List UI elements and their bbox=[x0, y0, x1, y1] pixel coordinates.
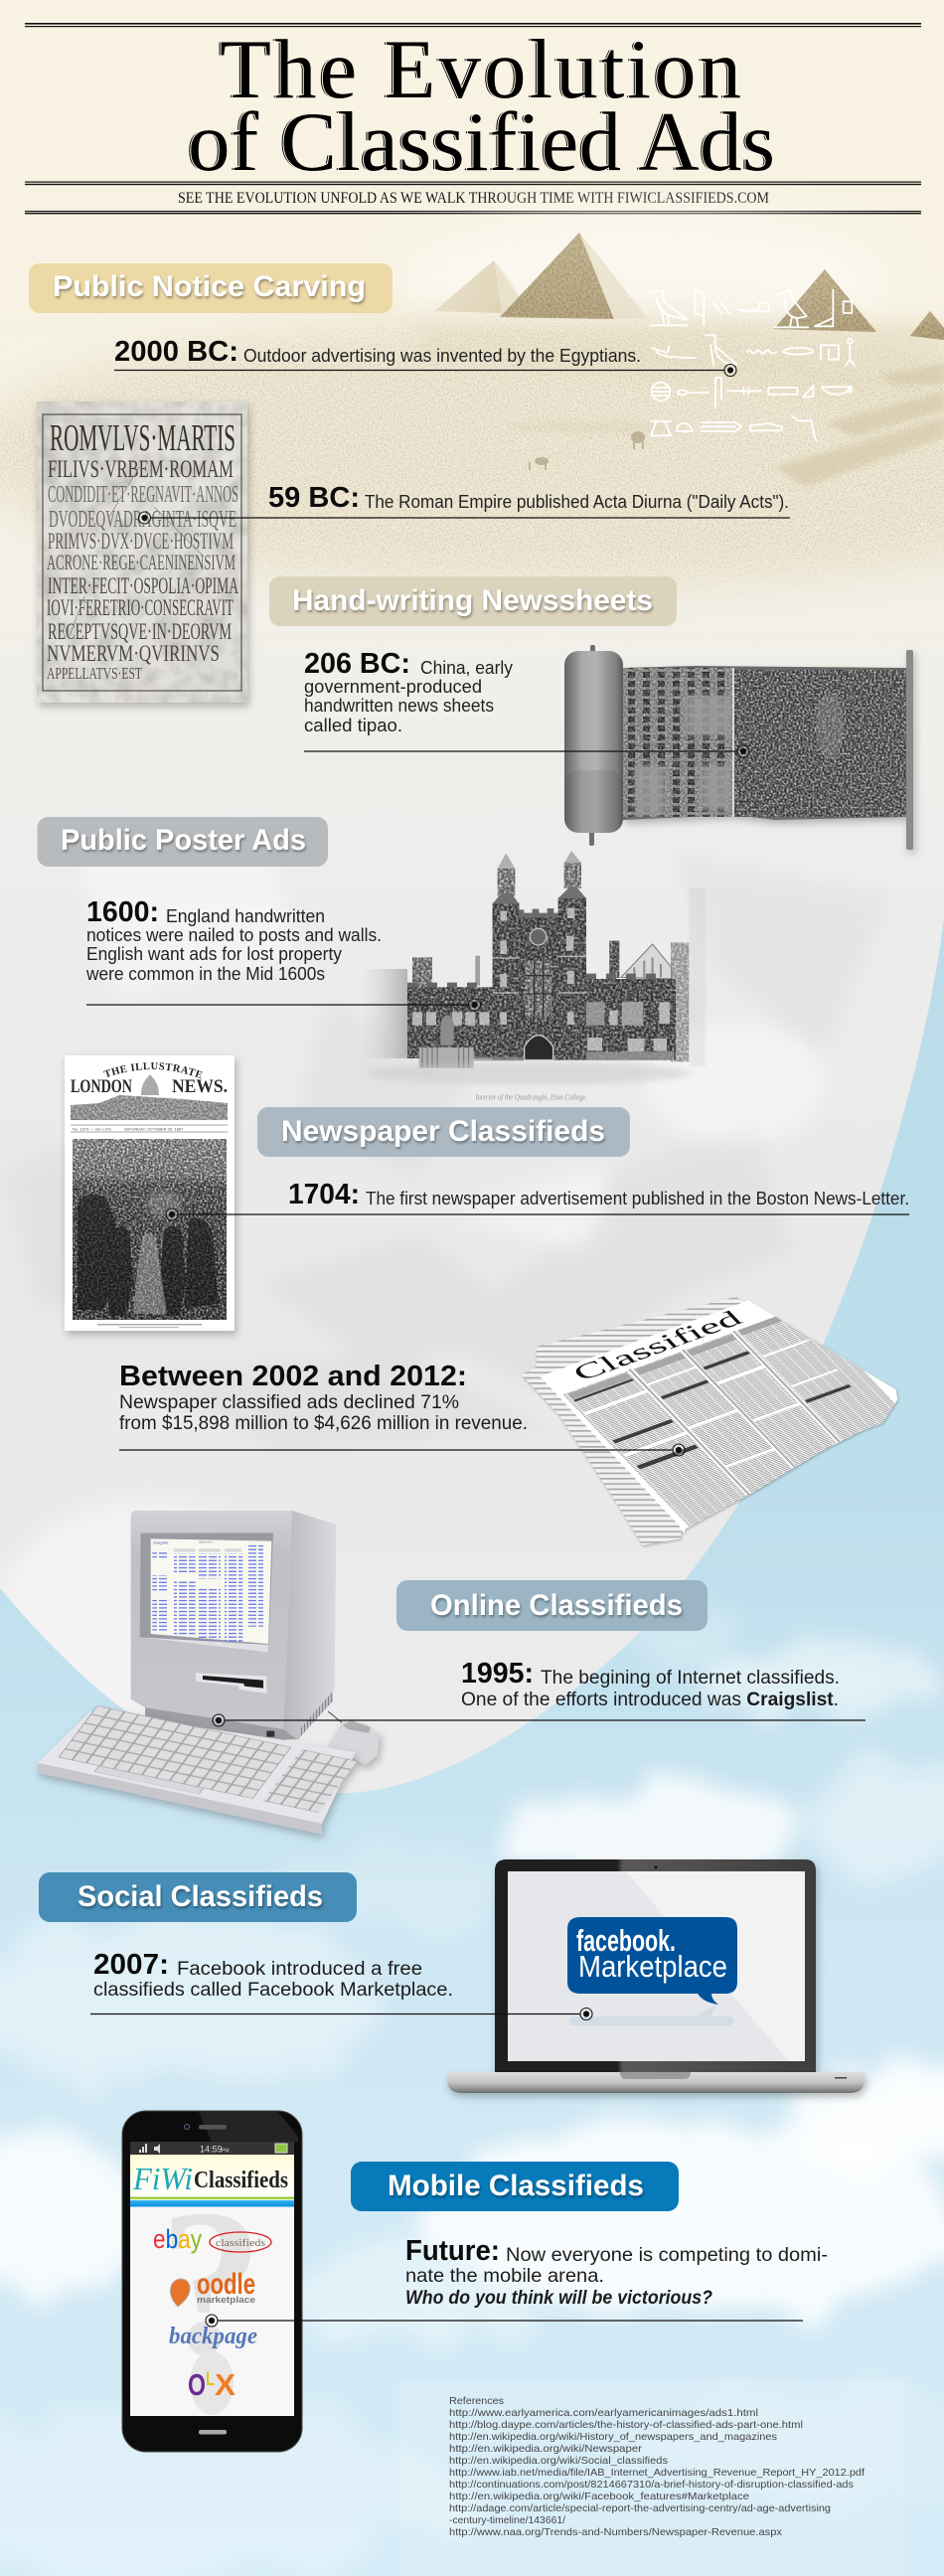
image: Roman inscription stone: CONDIDIT·ET·REGNAVIT·ANNOS bbox=[48, 482, 238, 508]
logo: FiWi Classifieds bbox=[130, 2161, 294, 2206]
stand bbox=[145, 1706, 300, 1740]
entry: 1995: One of the efforts introduced was Craigslist. bbox=[461, 1690, 839, 1710]
entry: 1704 bbox=[166, 1179, 909, 1220]
entry: Between 2002 and 2012: Between 2002 and 2012: bbox=[119, 1361, 467, 1392]
sky background bbox=[0, 894, 944, 2576]
section heading: Online Classifieds bbox=[396, 1580, 708, 1631]
entry: 2007: classifieds called Facebook Marketplace. bbox=[93, 1980, 453, 2001]
pyramid: large centre bbox=[500, 233, 648, 319]
speech bubble logo: facebook. bbox=[576, 1923, 676, 1958]
section heading: Newspaper Classifieds bbox=[257, 1107, 630, 1157]
logo: oodle marketplace bbox=[170, 2268, 255, 2307]
centre block bbox=[518, 917, 558, 1060]
entry: 2007: Facebook introduced a free bbox=[177, 1959, 422, 1980]
lid bbox=[495, 1859, 816, 2072]
lower double rule bbox=[25, 211, 921, 214]
entry: 1995: The begining of Internet classifieds. bbox=[541, 1668, 840, 1689]
paragraph gaps bbox=[583, 1339, 839, 1468]
references panel: http://en.wikipedia.org/wiki/Social_classifieds bbox=[449, 2455, 668, 2467]
references panel: http://en.wikipedia.org/wiki/Newspaper bbox=[449, 2443, 643, 2455]
references panel: http://blog.daype.com/articles/the-history-of-classified-ads-part-one.html bbox=[449, 2419, 803, 2431]
logo: backpage: backpage bbox=[169, 2324, 257, 2349]
entry: Future: Future: bbox=[405, 2235, 500, 2267]
section heading: Social Classifieds bbox=[39, 1872, 357, 1922]
camera and speaker bbox=[185, 2125, 227, 2129]
floppy slot bbox=[196, 1673, 266, 1693]
logo: ebay classifieds bbox=[153, 2224, 271, 2254]
logo: oodle marketplace: marketplace bbox=[197, 2295, 255, 2306]
home button bbox=[199, 2430, 227, 2435]
logo: FiWi Classifieds: FiWi bbox=[132, 2161, 193, 2196]
city engraving bbox=[71, 1095, 228, 1120]
references panel bbox=[398, 2379, 905, 2576]
references panel: http://continuations.com/post/8214667310/a-brief-history-of-disruption-classified-ads bbox=[449, 2479, 854, 2491]
references panel: -century-timeline/143661/ bbox=[449, 2514, 565, 2526]
large question mark: ? bbox=[159, 2168, 263, 2398]
entry: 2007 bbox=[90, 1949, 592, 2019]
screen bbox=[151, 1538, 271, 1644]
front sheet bbox=[540, 1300, 897, 1533]
caption: Interior of the Quadrangle, Eton College. bbox=[474, 1093, 587, 1102]
image: Roman inscription stone: DVODEQVADRAGINTA·ISQVE bbox=[49, 507, 236, 533]
screen bbox=[130, 2155, 294, 2416]
clouds bbox=[0, 1606, 944, 2576]
crumpled paper background with curved edge bbox=[0, 699, 944, 1793]
entry: 1600: 1600: bbox=[86, 896, 159, 928]
gate bbox=[525, 1036, 553, 1060]
section heading: Social Classifieds: Social Classifieds bbox=[78, 1880, 323, 1913]
entry: 206 BC: China, early bbox=[420, 658, 513, 678]
logo: oodle marketplace: oodle bbox=[197, 2268, 255, 2301]
entry: 1600: English want ads for lost property bbox=[86, 944, 342, 964]
entry: 59 BC: 59 BC: bbox=[268, 482, 360, 514]
ground bbox=[366, 1062, 691, 1084]
entry: 2000 BC: 2000 BC: bbox=[114, 336, 238, 368]
cover picture bbox=[73, 1139, 227, 1320]
entry: 206 BC: 206 BC: bbox=[304, 648, 410, 680]
entry: Future bbox=[206, 2235, 828, 2327]
entry: Future: Who do you think will be victorious? bbox=[405, 2288, 712, 2309]
tower string courses and windows bbox=[493, 907, 586, 1025]
image: Chinese scroll tipao bbox=[564, 645, 913, 850]
screen: craigslist bbox=[153, 1540, 169, 1545]
entry: 206 BC: handwritten news sheets bbox=[304, 696, 494, 716]
title line two: of Classified Ads bbox=[188, 95, 775, 189]
back sheet bbox=[522, 1297, 755, 1545]
entry: 206 BC: called tipao. bbox=[304, 716, 402, 735]
entry: 2007: 2007: bbox=[93, 1949, 169, 1981]
image: Illustrated London News front page: NEWS. bbox=[172, 1076, 228, 1097]
image: Roman inscription stone: PRIMVS·DVX·DVCE·HOSTIVM bbox=[48, 529, 234, 554]
separators bbox=[626, 1331, 842, 1496]
tagline: SEE THE EVOLUTION UNFOLD AS WE WALK THROUGH TIME WITH FIWICLASSIFIEDS.COM bbox=[178, 190, 769, 207]
body bbox=[122, 2111, 302, 2452]
references panel: References bbox=[449, 2395, 504, 2407]
references panel: http://adage.com/article/special-report-the-advertising-centry/ad-age-advertising bbox=[449, 2502, 831, 2514]
section heading: Public Notice Carving: Public Notice Carving bbox=[53, 270, 366, 303]
top double rule bbox=[25, 23, 921, 27]
section heading: Mobile Classifieds: Mobile Classifieds bbox=[388, 2170, 644, 2202]
image: laptop with Facebook Marketplace bbox=[447, 1859, 865, 2093]
middle double rule bbox=[25, 181, 921, 185]
logo: OLX: O bbox=[188, 2367, 206, 2402]
speech bubble logo: Marketplace bbox=[578, 1949, 727, 1984]
logo reflection bbox=[568, 2005, 733, 2025]
references panel: http://www.iab.net/media/file/IAB_Internet_Advertising_Revenue_Report_HY_2012.pdf bbox=[449, 2467, 865, 2479]
wing windows bbox=[412, 1002, 670, 1051]
title line one: The Evolution bbox=[218, 23, 739, 116]
logo: OLX: L bbox=[206, 2369, 215, 2390]
camels bbox=[529, 431, 645, 470]
references panel: http://en.wikipedia.org/wiki/Facebook_features#Marketplace bbox=[449, 2491, 749, 2502]
entry: 1704: 1704: bbox=[288, 1179, 360, 1210]
screen glare bbox=[626, 1871, 805, 2061]
front panel bbox=[131, 1511, 292, 1729]
image: Roman inscription stone: ROMVLVS·MARTIS bbox=[50, 417, 236, 459]
image: college engraving bbox=[361, 851, 706, 1102]
status bar bbox=[130, 2142, 294, 2155]
masthead: THE ILLUSTRATED bbox=[103, 1062, 203, 1079]
logo: OLX bbox=[188, 2351, 236, 2415]
pyramid: right bbox=[774, 269, 876, 332]
pyramid: small left bbox=[434, 260, 530, 314]
section heading: Hand-writing Newssheets bbox=[269, 576, 677, 626]
mouse bbox=[328, 1719, 380, 1765]
title line two: of Classified Ads bbox=[186, 95, 773, 189]
entry: 59 BC bbox=[139, 482, 790, 524]
title line one: The Evolution bbox=[220, 23, 741, 116]
masthead word: Classified bbox=[566, 1306, 748, 1385]
image: Roman inscription stone bbox=[37, 402, 247, 703]
image: Roman inscription stone: FILIVS·VRBEM·ROMAM bbox=[48, 456, 234, 483]
entry: 1600: notices were nailed to posts and walls. bbox=[86, 925, 382, 945]
title block bbox=[25, 23, 921, 214]
image: Roman inscription stone: INTER·FECIT·OSPOLIA·OPIMA bbox=[48, 573, 238, 598]
entry: 1995 bbox=[213, 1658, 865, 1726]
references panel: http://en.wikipedia.org/wiki/History_of_newspapers_and_magazines bbox=[449, 2431, 777, 2443]
references panel: http://www.earlyamerica.com/earlyamericanimages/ads1.html bbox=[449, 2407, 758, 2419]
entry: 1600 bbox=[85, 896, 481, 1011]
statue and fence bbox=[419, 1016, 474, 1068]
side panel bbox=[283, 1511, 336, 1740]
illustration: desert with pyramids bbox=[0, 214, 944, 636]
image: Roman inscription stone: RECEPTVSQVE·IN·DEORVM bbox=[48, 619, 232, 644]
logo: FiWi Classifieds: Classifieds bbox=[194, 2168, 288, 2193]
section heading: Public Poster Ads bbox=[38, 817, 328, 867]
section heading: Public Notice Carving bbox=[29, 263, 393, 313]
entry: 2000 BC bbox=[114, 336, 736, 376]
entry: 59 BC: The Roman Empire published Acta Diurna ("Daily Acts"). bbox=[365, 492, 789, 512]
image: smartphone with classifieds logos bbox=[122, 2111, 302, 2452]
entry: Between 2002 and 2012: Newspaper classified ads declined 71% bbox=[119, 1392, 459, 1413]
image: Roman inscription stone: NVMERVM·QVIRINVS bbox=[47, 641, 220, 666]
entry: 206 BC: government-produced bbox=[304, 677, 482, 697]
keyboard bbox=[38, 1705, 358, 1835]
screen: Santa Ana bbox=[199, 1540, 213, 1544]
wings bbox=[407, 979, 676, 1060]
speech bubble logo bbox=[567, 1917, 737, 2005]
logo: ebay classifieds: ebay bbox=[153, 2224, 202, 2254]
status bar: PM bbox=[222, 2149, 229, 2155]
entry: Between 2002 and 2012: from $15,898 million to $4,626 million in revenue. bbox=[119, 1413, 528, 1434]
status bar: 14:59 bbox=[200, 2145, 223, 2155]
entry: 1600: were common in the Mid 1600s bbox=[85, 964, 325, 984]
image: Roman inscription stone: APPELLATVS·EST bbox=[47, 664, 142, 683]
column headers bbox=[566, 1314, 788, 1399]
entry: 1995: 1995: bbox=[461, 1658, 534, 1690]
base bbox=[447, 2072, 865, 2093]
entry: Future: Now everyone is competing to domi- bbox=[506, 2245, 828, 2266]
section heading: Newspaper Classifieds: Newspaper Classifieds bbox=[281, 1115, 605, 1148]
section heading: Mobile Classifieds bbox=[351, 2162, 679, 2211]
entry: 1704: The first newspaper advertisement published in the Boston News-Letter. bbox=[366, 1189, 909, 1208]
image: Illustrated London News front page: LONDON bbox=[71, 1076, 132, 1097]
entry: Between 2002 and 2012 bbox=[119, 1361, 685, 1456]
entry: 1600: England handwritten bbox=[166, 906, 325, 926]
icon: white hieroglyphs bbox=[651, 290, 855, 440]
image: vintage desktop computer bbox=[38, 1511, 380, 1835]
image: Roman inscription stone: IOVI·FERETRIO·CONSECRAVIT bbox=[47, 595, 234, 620]
dateline: No. 1973 — Vol. LXXI bbox=[73, 1127, 111, 1131]
cable bbox=[328, 1711, 348, 1727]
image: folded classified newspaper bbox=[522, 1298, 899, 1548]
faded buildings bbox=[361, 969, 407, 1058]
pyramid: far right bbox=[910, 311, 944, 340]
logo: OLX: X bbox=[215, 2367, 236, 2402]
references panel: http://www.naa.org/Trends-and-Numbers/Newspaper-Revenue.aspx bbox=[449, 2526, 783, 2538]
image: Illustrated London News front page bbox=[62, 1055, 240, 1340]
section heading: Online Classifieds: Online Classifieds bbox=[430, 1589, 683, 1622]
dateline bbox=[71, 1125, 228, 1132]
entry: 2000 BC: Outdoor advertising was invented by the Egyptians. bbox=[243, 346, 641, 366]
section heading: Hand-writing Newssheets: Hand-writing Newssheets bbox=[292, 584, 653, 617]
entry: Future: nate the mobile arena. bbox=[405, 2266, 604, 2287]
dateline: SATURDAY, OCTOBER 26, 1867 bbox=[124, 1127, 184, 1131]
section heading: Public Poster Ads: Public Poster Ads bbox=[61, 824, 306, 857]
image: Roman inscription stone: ACRONE·REGE·CAENINENSIVM bbox=[47, 550, 236, 574]
logo: ebay classifieds: classifieds bbox=[216, 2237, 265, 2249]
entry: 206 BC bbox=[304, 648, 749, 757]
towers bbox=[493, 862, 586, 1060]
